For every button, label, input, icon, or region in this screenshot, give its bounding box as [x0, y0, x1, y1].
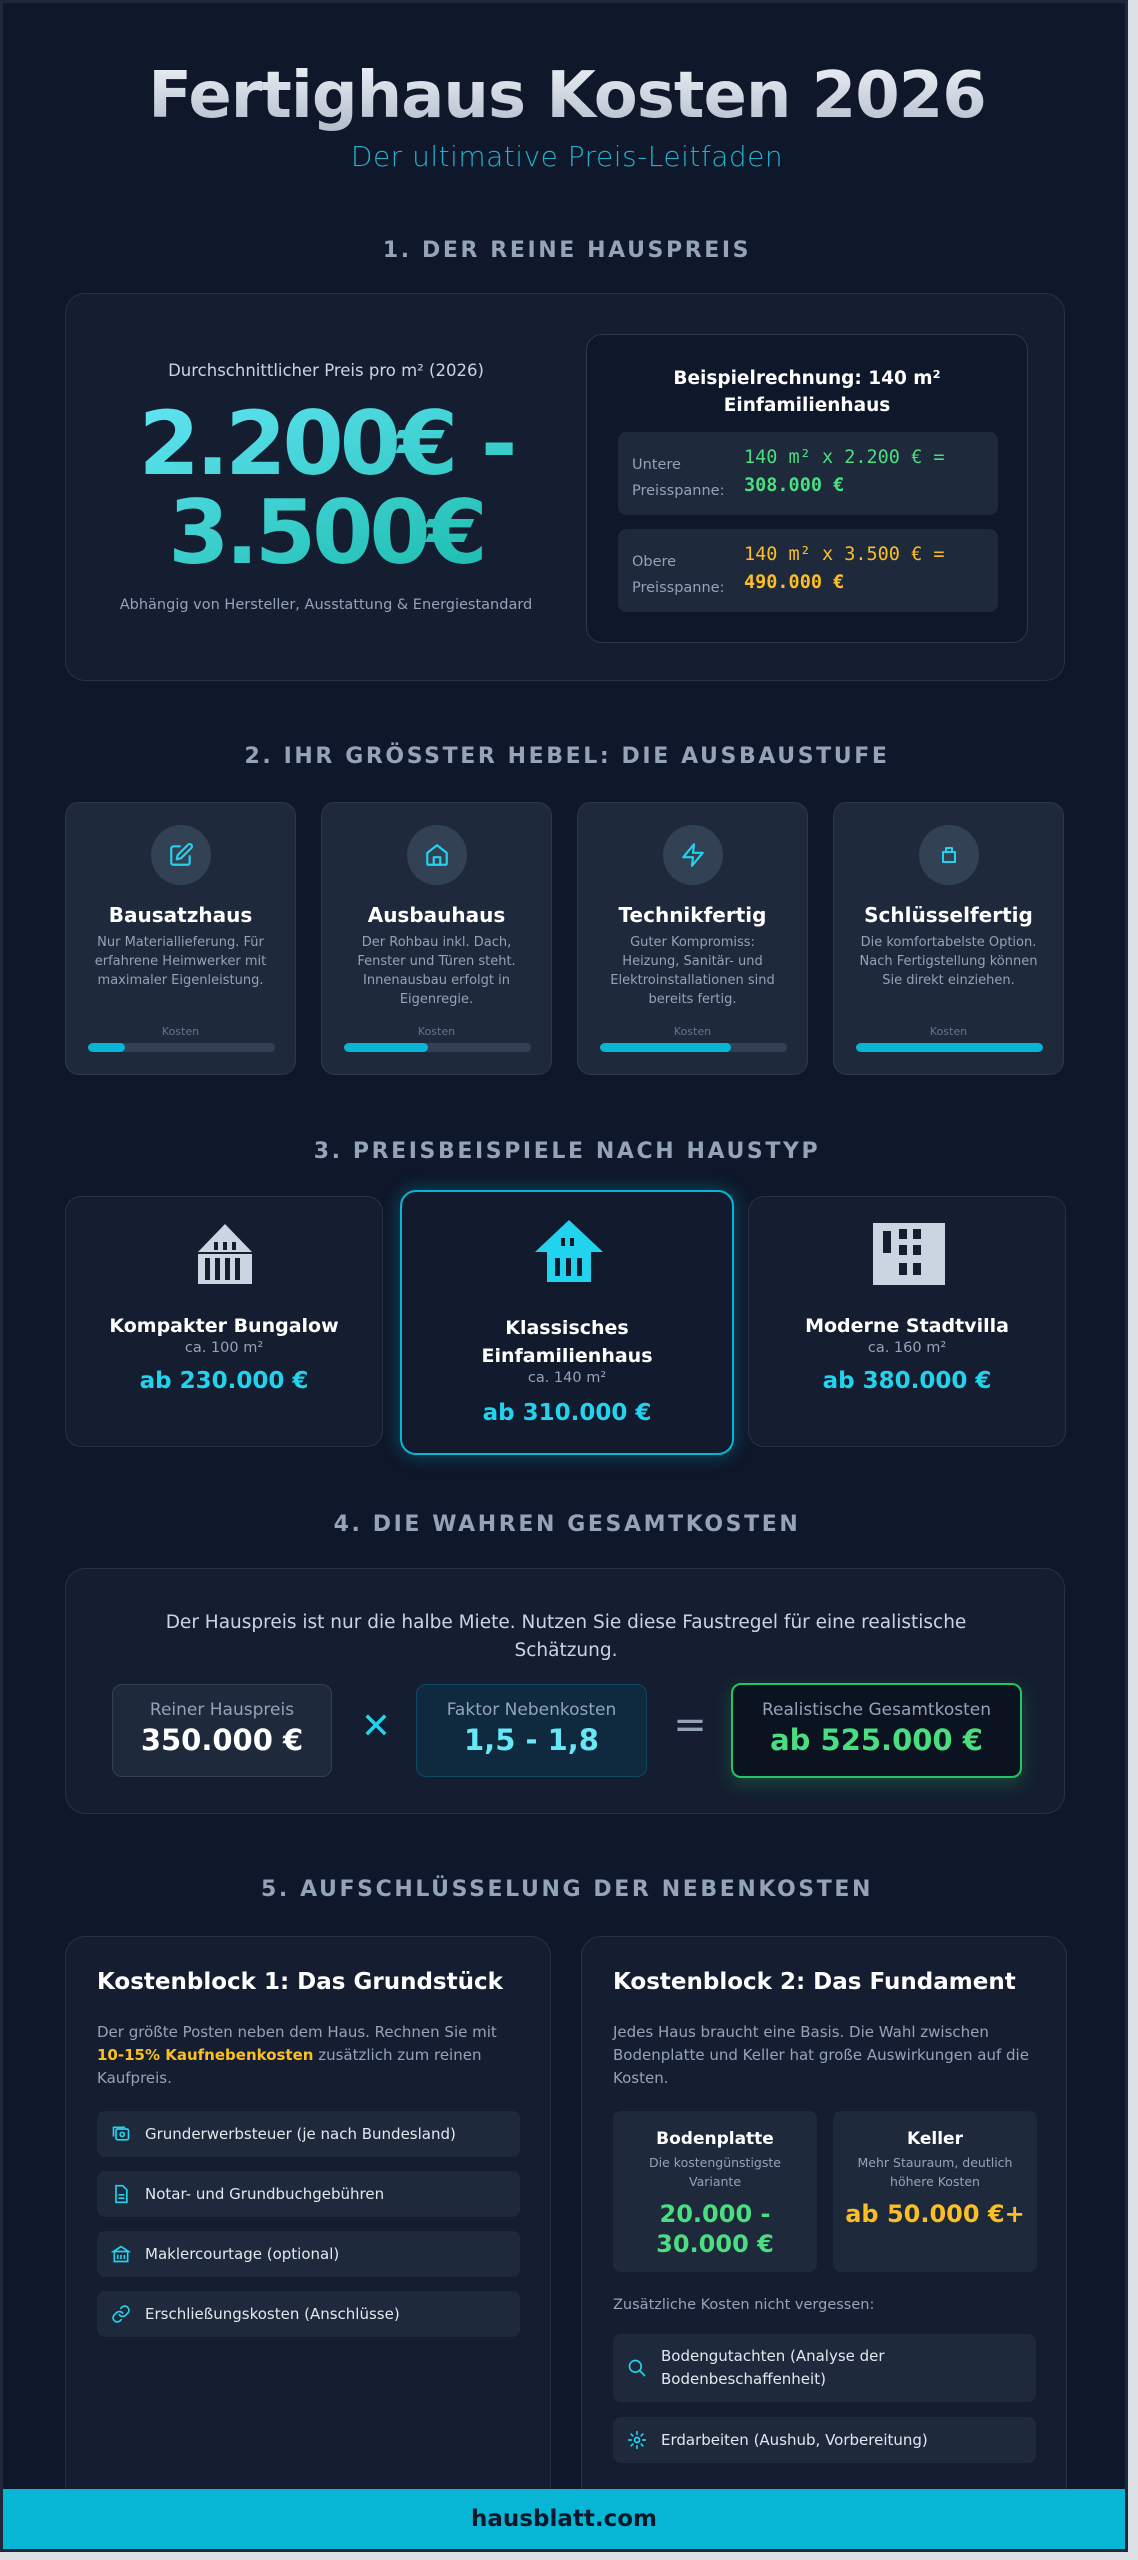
example title	[673, 368, 941, 416]
panel: gesamtkosten	[65, 1568, 1065, 1814]
box: factor: 1,5 - 1,8	[464, 1723, 599, 1757]
box: factor	[416, 1684, 647, 1777]
heading: section 3: 3. PREISBEISPIELE NACH HAUSTYP	[314, 1139, 820, 1164]
card: Einfamilienhaus (highlighted): ab 310.000 €	[483, 1400, 651, 1426]
card: Einfamilienhaus (highlighted): ca. 140 m²	[528, 1370, 606, 1386]
card: Bungalow: Kompakter Bungalow	[109, 1315, 339, 1337]
card: Technikfertig: Heizung, Sanitär- und Elektroinstallationen sind bereits fertig.	[610, 954, 775, 1007]
card: Stadtvilla: Moderne Stadtvilla	[805, 1315, 1009, 1337]
row: lower range	[618, 432, 998, 515]
subtitle: Der ultimative Preis-Leitfaden	[351, 140, 783, 173]
icon: key bag	[919, 825, 979, 885]
card: Technikfertig	[577, 802, 808, 1075]
card: Technikfertig: Kosten	[674, 1025, 711, 1038]
box: factor: Faktor Nebenkosten	[447, 1700, 616, 1720]
subheading: additional costs: Zusätzliche Kosten nicht vergessen:	[613, 2297, 874, 2313]
example title: Beispielrechnung: 140 m²	[673, 368, 941, 389]
box: total: ab 525.000 €	[770, 1723, 983, 1757]
block text: Jedes Haus braucht eine Basis. Die Wahl zwischen Bodenplatte und Keller hat große Auswirkungen auf die Kosten.	[613, 2023, 1029, 2087]
list item: Bodengutachten	[613, 2334, 1036, 2402]
icon: bungalow	[198, 1224, 252, 1284]
card: Bungalow: ca. 100 m²	[185, 1340, 263, 1356]
row: upper range	[618, 529, 998, 612]
big price range	[76, 399, 576, 577]
heading: section 4: 4. DIE WAHREN GESAMTKOSTEN	[334, 1512, 800, 1537]
row: upper range: Obere	[632, 554, 676, 570]
option: Bodenplatte	[613, 2111, 817, 2272]
card: Schlüsselfertig: Schlüsselfertig	[864, 903, 1033, 927]
row: upper range: 140 m² x 3.500 € =	[744, 544, 944, 565]
box: house price: Reiner Hauspreis	[150, 1700, 294, 1720]
list item: Erschließung	[97, 2291, 520, 2337]
box: total	[731, 1683, 1022, 1778]
heading: section 2: 2. IHR GRÖSSTER HEBEL: DIE AUSBAUSTUFE	[244, 744, 890, 769]
footer	[3, 2489, 1125, 2549]
card: Bausatzhaus	[65, 802, 296, 1075]
option: Keller	[833, 2111, 1037, 2272]
icon: house	[407, 825, 467, 885]
list item: Notar	[97, 2171, 520, 2217]
card: Ausbauhaus	[321, 802, 552, 1075]
card: Einfamilienhaus (highlighted): Klassisches	[505, 1317, 629, 1339]
example calculation box	[586, 334, 1028, 643]
list item: Grunderwerbsteuer: Grunderwerbsteuer (je nach Bundesland)	[145, 2125, 456, 2143]
card: Einfamilienhaus (highlighted): Einfamilienhaus	[481, 1345, 653, 1367]
list item: Makler	[97, 2231, 520, 2277]
operator: equals: =	[673, 1702, 707, 1748]
card: Schlüsselfertig: Die komfortabelste Option. Nach Fertigstellung können Sie direkt einziehen.	[860, 935, 1037, 988]
card: Ausbauhaus: Kosten	[418, 1025, 455, 1038]
card: Technikfertig: Technikfertig	[619, 903, 766, 927]
big price range: 3.500€	[168, 481, 484, 584]
heading: section 1: 1. DER REINE HAUSPREIS	[383, 238, 751, 263]
option: Bodenplatte: 30.000 €	[656, 2230, 774, 2258]
option: Bodenplatte: Variante	[689, 2174, 741, 2189]
list item: Grunderwerbsteuer	[97, 2111, 520, 2157]
card: Stadtvilla	[748, 1196, 1066, 1447]
card: Ausbauhaus: Der Rohbau inkl. Dach, Fenster und Türen steht. Innenausbau erfolgt in Eigenregie.	[357, 935, 516, 1007]
title: Fertighaus Kosten 2026	[148, 59, 986, 133]
row: lower range: Preisspanne:	[632, 483, 724, 499]
card: Einfamilienhaus (highlighted)	[400, 1190, 734, 1455]
box: total: Realistische Gesamtkosten	[762, 1700, 991, 1720]
list item: Makler: Maklercourtage (optional)	[145, 2245, 339, 2263]
card: Bausatzhaus: Nur Materiallieferung. Für erfahrene Heimwerker mit maximaler Eigenleistung.	[95, 935, 266, 988]
list item: Erdarbeiten: Erdarbeiten (Aushub, Vorbereitung)	[661, 2431, 928, 2449]
icon: bolt	[663, 825, 723, 885]
option: Keller: ab 50.000 €+	[845, 2200, 1025, 2228]
option: Keller: Keller	[907, 2129, 963, 2149]
option: Keller: höhere Kosten	[890, 2174, 980, 2189]
icon: edit	[151, 825, 211, 885]
list item: Notar: Notar- und Grundbuchgebühren	[145, 2185, 384, 2203]
card: Ausbauhaus: Ausbauhaus	[368, 903, 505, 927]
list item: Erschließung: Erschließungskosten (Anschlüsse)	[145, 2305, 400, 2323]
card: Schlüsselfertig	[833, 802, 1064, 1075]
panel: hauspreis	[65, 293, 1065, 681]
row: lower range: 308.000 €	[744, 475, 844, 496]
row: upper range: Preisspanne:	[632, 580, 724, 596]
card: Technikfertig: Guter Kompromiss:	[630, 935, 755, 950]
list item: Erdarbeiten	[613, 2417, 1036, 2463]
option: Bodenplatte: 20.000 -	[660, 2200, 770, 2228]
label: price per m2: Durchschnittlicher Preis pro m² (2026)	[168, 361, 484, 380]
option: Bodenplatte: Bodenplatte	[656, 2129, 774, 2149]
block title: Kostenblock 2: Das Fundament	[613, 1969, 1016, 1995]
box: house price: 350.000 €	[141, 1723, 303, 1757]
big price range: 2.200€ -	[139, 392, 513, 495]
title	[3, 56, 1131, 136]
block text: Der größte Posten neben dem Haus. Rechnen Sie mit 10-15% Kaufnebenkosten zusätzlich zum reinen Kaufpreis.	[97, 2023, 497, 2087]
row: lower range: 140 m² x 2.200 € =	[744, 447, 944, 468]
row: lower range: Untere	[632, 457, 681, 473]
example title: Einfamilienhaus	[724, 395, 890, 416]
list item: Bodengutachten: Bodengutachten (Analyse der	[661, 2347, 885, 2365]
row: upper range: 490.000 €	[744, 572, 844, 593]
heading: section 5: 5. AUFSCHLÜSSELUNG DER NEBENKOSTEN	[261, 1877, 873, 1902]
card: Bungalow: ab 230.000 €	[140, 1368, 308, 1394]
block title: Kostenblock 1: Das Grundstück	[97, 1969, 503, 1995]
card: Stadtvilla: ca. 160 m²	[868, 1340, 946, 1356]
card: Bausatzhaus: Kosten	[162, 1025, 199, 1038]
card: Bungalow	[65, 1196, 383, 1447]
card: Schlüsselfertig: Kosten	[930, 1025, 967, 1038]
operator: times: ✕	[361, 1706, 391, 1747]
footer: hausblatt.com	[471, 2506, 657, 2532]
intro text: Der Hauspreis ist nur die halbe Miete. Nutzen Sie diese Faustregel für eine realistische Schätzung.	[166, 1612, 966, 1661]
option: Keller: Mehr Stauraum, deutlich	[858, 2155, 1012, 2170]
icon: family house	[535, 1220, 603, 1282]
panel: Grundstück	[65, 1936, 551, 2516]
list item: Bodengutachten: Bodenbeschaffenheit)	[661, 2370, 826, 2388]
card: Stadtvilla: ab 380.000 €	[823, 1368, 991, 1394]
card: Bausatzhaus: Bausatzhaus	[109, 903, 252, 927]
box: house price	[112, 1684, 332, 1777]
option: Bodenplatte: Die kostengünstigste	[649, 2155, 781, 2170]
icon: city villa	[873, 1223, 945, 1285]
note: Abhängig von Hersteller, Ausstattung & Energiestandard	[120, 597, 532, 613]
panel: Fundament	[581, 1936, 1067, 2516]
